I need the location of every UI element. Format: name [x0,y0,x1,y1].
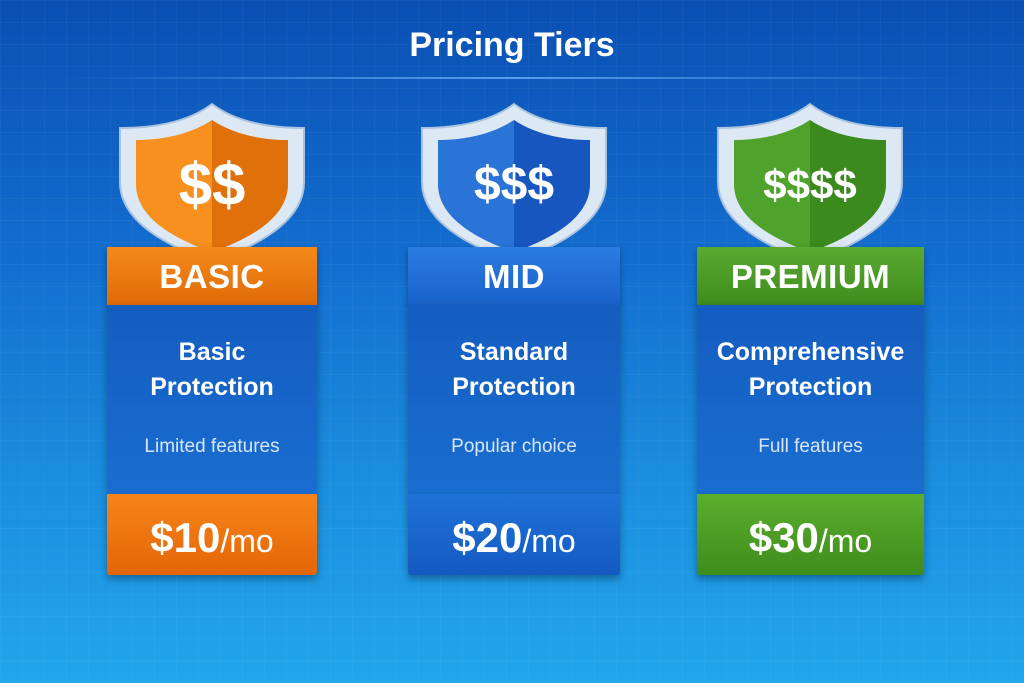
card body: mid: Standard [460,338,568,366]
card body: premium [697,305,924,494]
card body: premium: Full features [758,436,863,457]
banner: basic [107,247,317,305]
price: basic [107,494,317,575]
icon: shield mid [421,102,607,247]
price: mid: $20/mo [452,514,576,561]
card body: mid [408,305,620,494]
price: mid [408,494,620,575]
icon: shield mid: $$$ [474,158,554,211]
title: Pricing Tiers [409,26,615,64]
card body: premium: Protection [749,373,872,401]
card body: basic [107,305,317,494]
icon: shield basic: $$ [179,151,245,218]
banner: basic: BASIC [159,258,265,295]
price: basic: $10/mo [150,514,274,561]
banner: mid: MID [483,258,545,295]
card body: mid: Protection [452,373,576,401]
price: premium [697,494,924,575]
banner: premium [697,247,924,305]
card body: premium: Comprehensive [717,338,904,366]
banner: mid [408,247,620,305]
banner: premium: PREMIUM [731,258,890,295]
card body: basic: Basic [179,338,245,366]
price: premium: $30/mo [749,514,872,561]
card body: mid: Popular choice [451,436,577,457]
icon: shield premium: $$$$ [763,161,857,208]
icon: shield basic [119,102,305,247]
card body: basic: Limited features [144,436,280,457]
card body: basic: Protection [150,373,274,401]
icon: shield premium [717,102,903,247]
